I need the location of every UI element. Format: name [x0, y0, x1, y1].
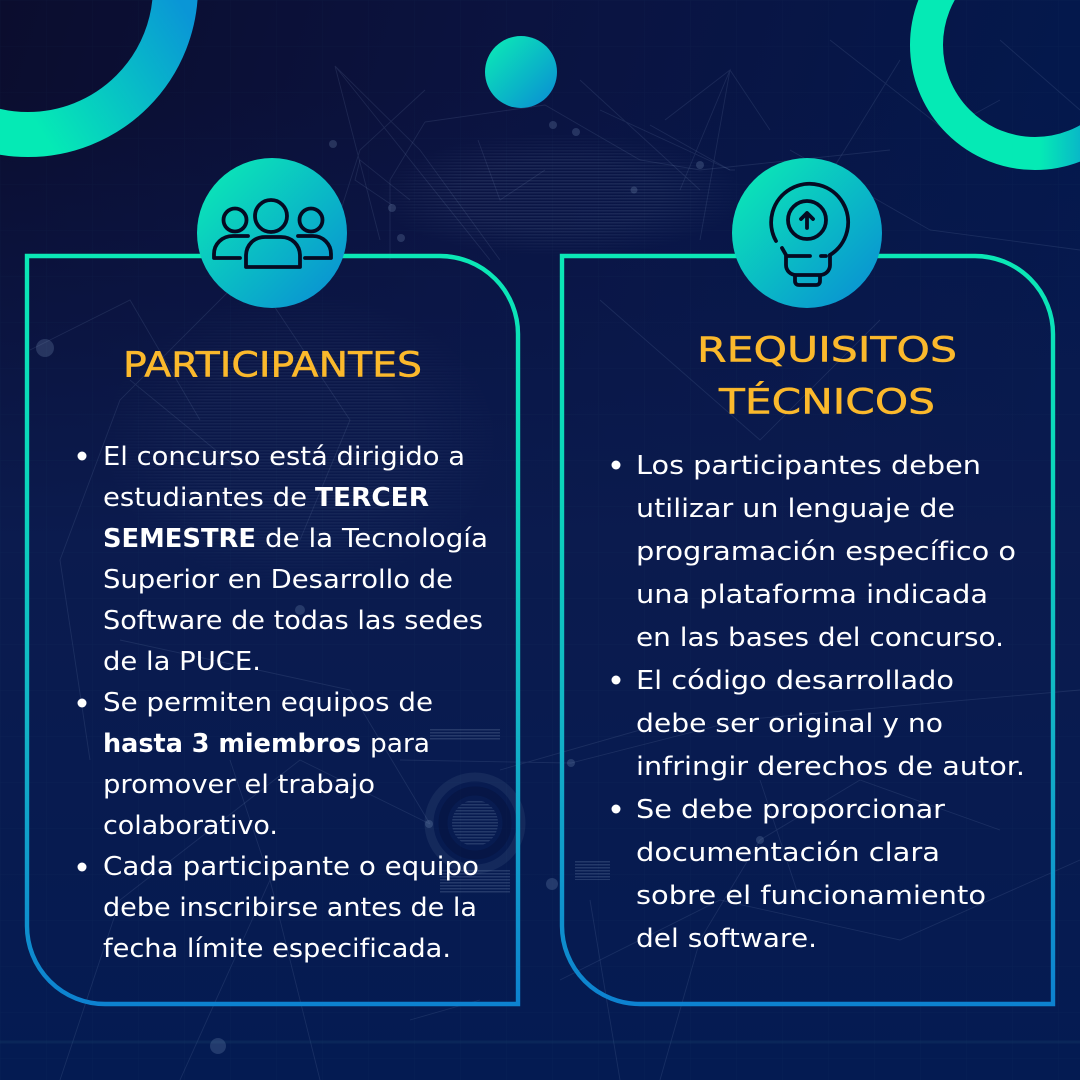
panel: participantes — [27, 158, 518, 1004]
panel frame: participantes — [27, 256, 518, 1004]
bullet list: participantes — [78, 442, 488, 964]
bullet list: participantes: fecha límite especificada. — [103, 934, 451, 964]
decorative dot: top centre — [485, 36, 557, 108]
bullet list: participantes: El concurso está dirigido a — [103, 442, 465, 472]
panel frame: requisitos tecnicos — [562, 256, 1053, 1004]
bullet list: requisitos tecnicos: Los participantes deben — [636, 451, 981, 481]
bullet list: participantes: TERCER — [315, 483, 429, 513]
bullet list: participantes: Software de todas las sedes — [103, 606, 483, 636]
bullet list: requisitos tecnicos: El código desarrollado — [636, 666, 954, 696]
bullet list: participantes: colaborativo. — [103, 811, 278, 841]
bullet list: participantes: de la Tecnología — [265, 524, 488, 554]
heading: requisitos tecnicos — [697, 330, 957, 422]
bullet list: participantes: estudiantes de — [103, 483, 307, 513]
bullet list: participantes: para — [370, 729, 430, 759]
bullet list: participantes: Superior en Desarrollo de — [103, 565, 453, 595]
heading: participantes: PARTICIPANTES — [123, 346, 422, 386]
bullet list: requisitos tecnicos — [612, 451, 1025, 954]
bullet list: participantes: Cada participante o equipo — [103, 852, 479, 882]
decorative ring: top left — [0, 0, 176, 134]
bullet list: requisitos tecnicos: documentación clara — [636, 838, 940, 868]
icon: light bulb with arrow — [732, 158, 882, 308]
heading: requisitos tecnicos: REQUISITOS — [697, 330, 957, 370]
bullet list: requisitos tecnicos: Se debe proporcionar — [636, 795, 946, 825]
bullet list: participantes: SEMESTRE — [103, 524, 256, 554]
bullet list: requisitos tecnicos: utilizar un lenguaje de — [636, 494, 955, 524]
bullet list: participantes: Se permiten equipos de — [103, 688, 433, 718]
icon: people group — [197, 158, 347, 308]
bullet list: requisitos tecnicos: sobre el funcionamiento — [636, 881, 986, 911]
bullet list: requisitos tecnicos: programación específico o — [636, 537, 1016, 567]
decorative ring: top right — [926, 0, 1080, 154]
bullet list: participantes: promover el trabajo — [103, 770, 375, 800]
bullet list: participantes: hasta 3 miembros — [103, 729, 361, 759]
bullet list: participantes: de la PUCE. — [103, 647, 261, 677]
heading: requisitos tecnicos: TÉCNICOS — [718, 382, 935, 422]
bullet list: requisitos tecnicos: en las bases del concurso. — [636, 623, 1004, 653]
bullet list: requisitos tecnicos: infringir derechos de autor. — [636, 752, 1025, 782]
bullet list: requisitos tecnicos: del software. — [636, 924, 817, 954]
bullet list: requisitos tecnicos: debe ser original y no — [636, 709, 943, 739]
bullet list: participantes: debe inscribirse antes de la — [103, 893, 477, 923]
bullet list: requisitos tecnicos: una plataforma indicada — [636, 580, 988, 610]
panel: requisitos tecnicos — [562, 158, 1053, 1004]
